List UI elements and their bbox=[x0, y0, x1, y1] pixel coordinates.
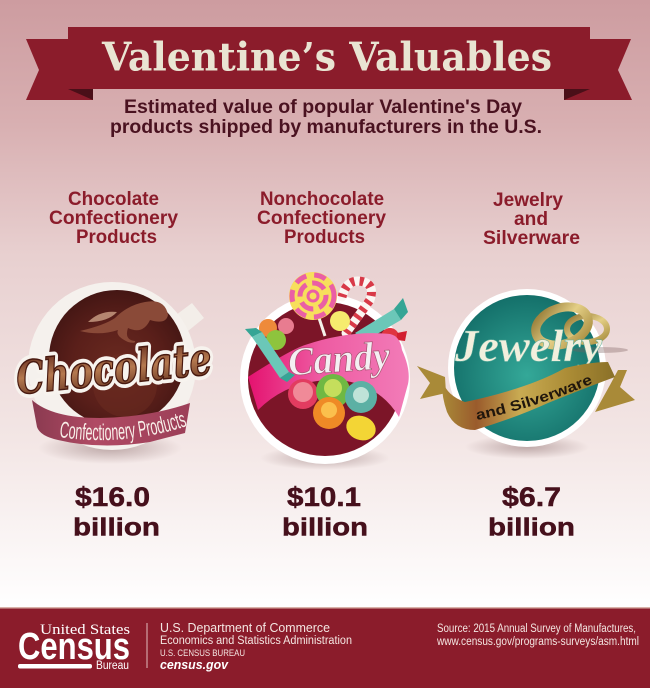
heading: nonchocolate: Confectionery bbox=[257, 208, 386, 229]
department text: Economics and Statistics Administration bbox=[160, 635, 352, 647]
source bbox=[436, 623, 639, 648]
heading: jewelry: Jewelry bbox=[493, 190, 563, 211]
ribbon text: and Silverware bbox=[476, 377, 592, 420]
heading: nonchocolate bbox=[257, 189, 386, 248]
balls bottom bbox=[288, 374, 379, 444]
ring shadow bbox=[572, 347, 628, 353]
value: candy: $10.1 bbox=[287, 482, 361, 512]
ribbon tails bbox=[417, 366, 635, 412]
census logo: Census bbox=[18, 626, 130, 668]
department text: U.S. CENSUS BUREAU bbox=[160, 648, 245, 659]
value: candy: billion bbox=[282, 514, 368, 542]
chocolate word: Chocolate bbox=[14, 332, 214, 405]
heading: chocolate: Chocolate bbox=[68, 189, 159, 210]
subtitle: products shipped by manufacturers in the U.S. bbox=[110, 117, 542, 138]
pink ribbon bbox=[248, 333, 409, 417]
gold ribbon bbox=[442, 362, 615, 430]
census logo: Bureau bbox=[96, 660, 129, 672]
ribbon bbox=[32, 400, 190, 446]
heading: nonchocolate: Products bbox=[284, 227, 365, 248]
subtitle: Estimated value of popular Valentine's Day bbox=[124, 97, 522, 118]
teal wrapped candy left bbox=[245, 328, 295, 382]
department text: census.gov bbox=[160, 658, 229, 672]
heading: chocolate: Confectionery bbox=[49, 208, 178, 229]
lollipop bbox=[289, 272, 337, 336]
icon: jewelry bbox=[417, 289, 635, 458]
cup handle bbox=[176, 303, 204, 331]
icon: chocolate cup bbox=[14, 282, 214, 462]
ribbon text: Confectionery Products bbox=[60, 414, 186, 444]
title banner bbox=[26, 27, 632, 100]
rings bbox=[531, 301, 607, 351]
department text bbox=[160, 620, 352, 672]
heading: chocolate bbox=[49, 189, 178, 248]
value: jewelry: $6.7 bbox=[502, 482, 561, 512]
red wrapped candy bbox=[381, 328, 407, 346]
value: chocolate: billion bbox=[73, 514, 160, 542]
value: jewelry: billion bbox=[488, 514, 575, 542]
value: candy bbox=[282, 482, 368, 542]
title: Valentine’s Valuables bbox=[101, 34, 552, 80]
heading: jewelry bbox=[483, 190, 580, 249]
value: chocolate: $16.0 bbox=[75, 482, 150, 512]
heading: jewelry: and bbox=[514, 209, 548, 230]
census logo: United States bbox=[40, 622, 130, 638]
chocolate word: Chocolate bbox=[14, 332, 214, 405]
chocolate splash bbox=[80, 301, 168, 343]
balls top left bbox=[259, 318, 294, 350]
candy word: Candy bbox=[286, 332, 392, 384]
candy cane bbox=[342, 281, 372, 333]
teal wrapped candy right bbox=[355, 298, 408, 341]
subtitle bbox=[110, 97, 542, 138]
heading: nonchocolate: Nonchocolate bbox=[260, 189, 384, 210]
yellow wrapped candy bbox=[330, 311, 350, 331]
heading: jewelry: Silverware bbox=[483, 228, 580, 249]
value: jewelry bbox=[488, 482, 575, 542]
value: chocolate bbox=[73, 482, 160, 542]
heading: chocolate: Products bbox=[76, 227, 157, 248]
jewelry word: Jewelry bbox=[454, 320, 603, 371]
footer bbox=[0, 607, 650, 688]
icon: candy bbox=[240, 272, 410, 470]
department text: U.S. Department of Commerce bbox=[160, 620, 330, 635]
